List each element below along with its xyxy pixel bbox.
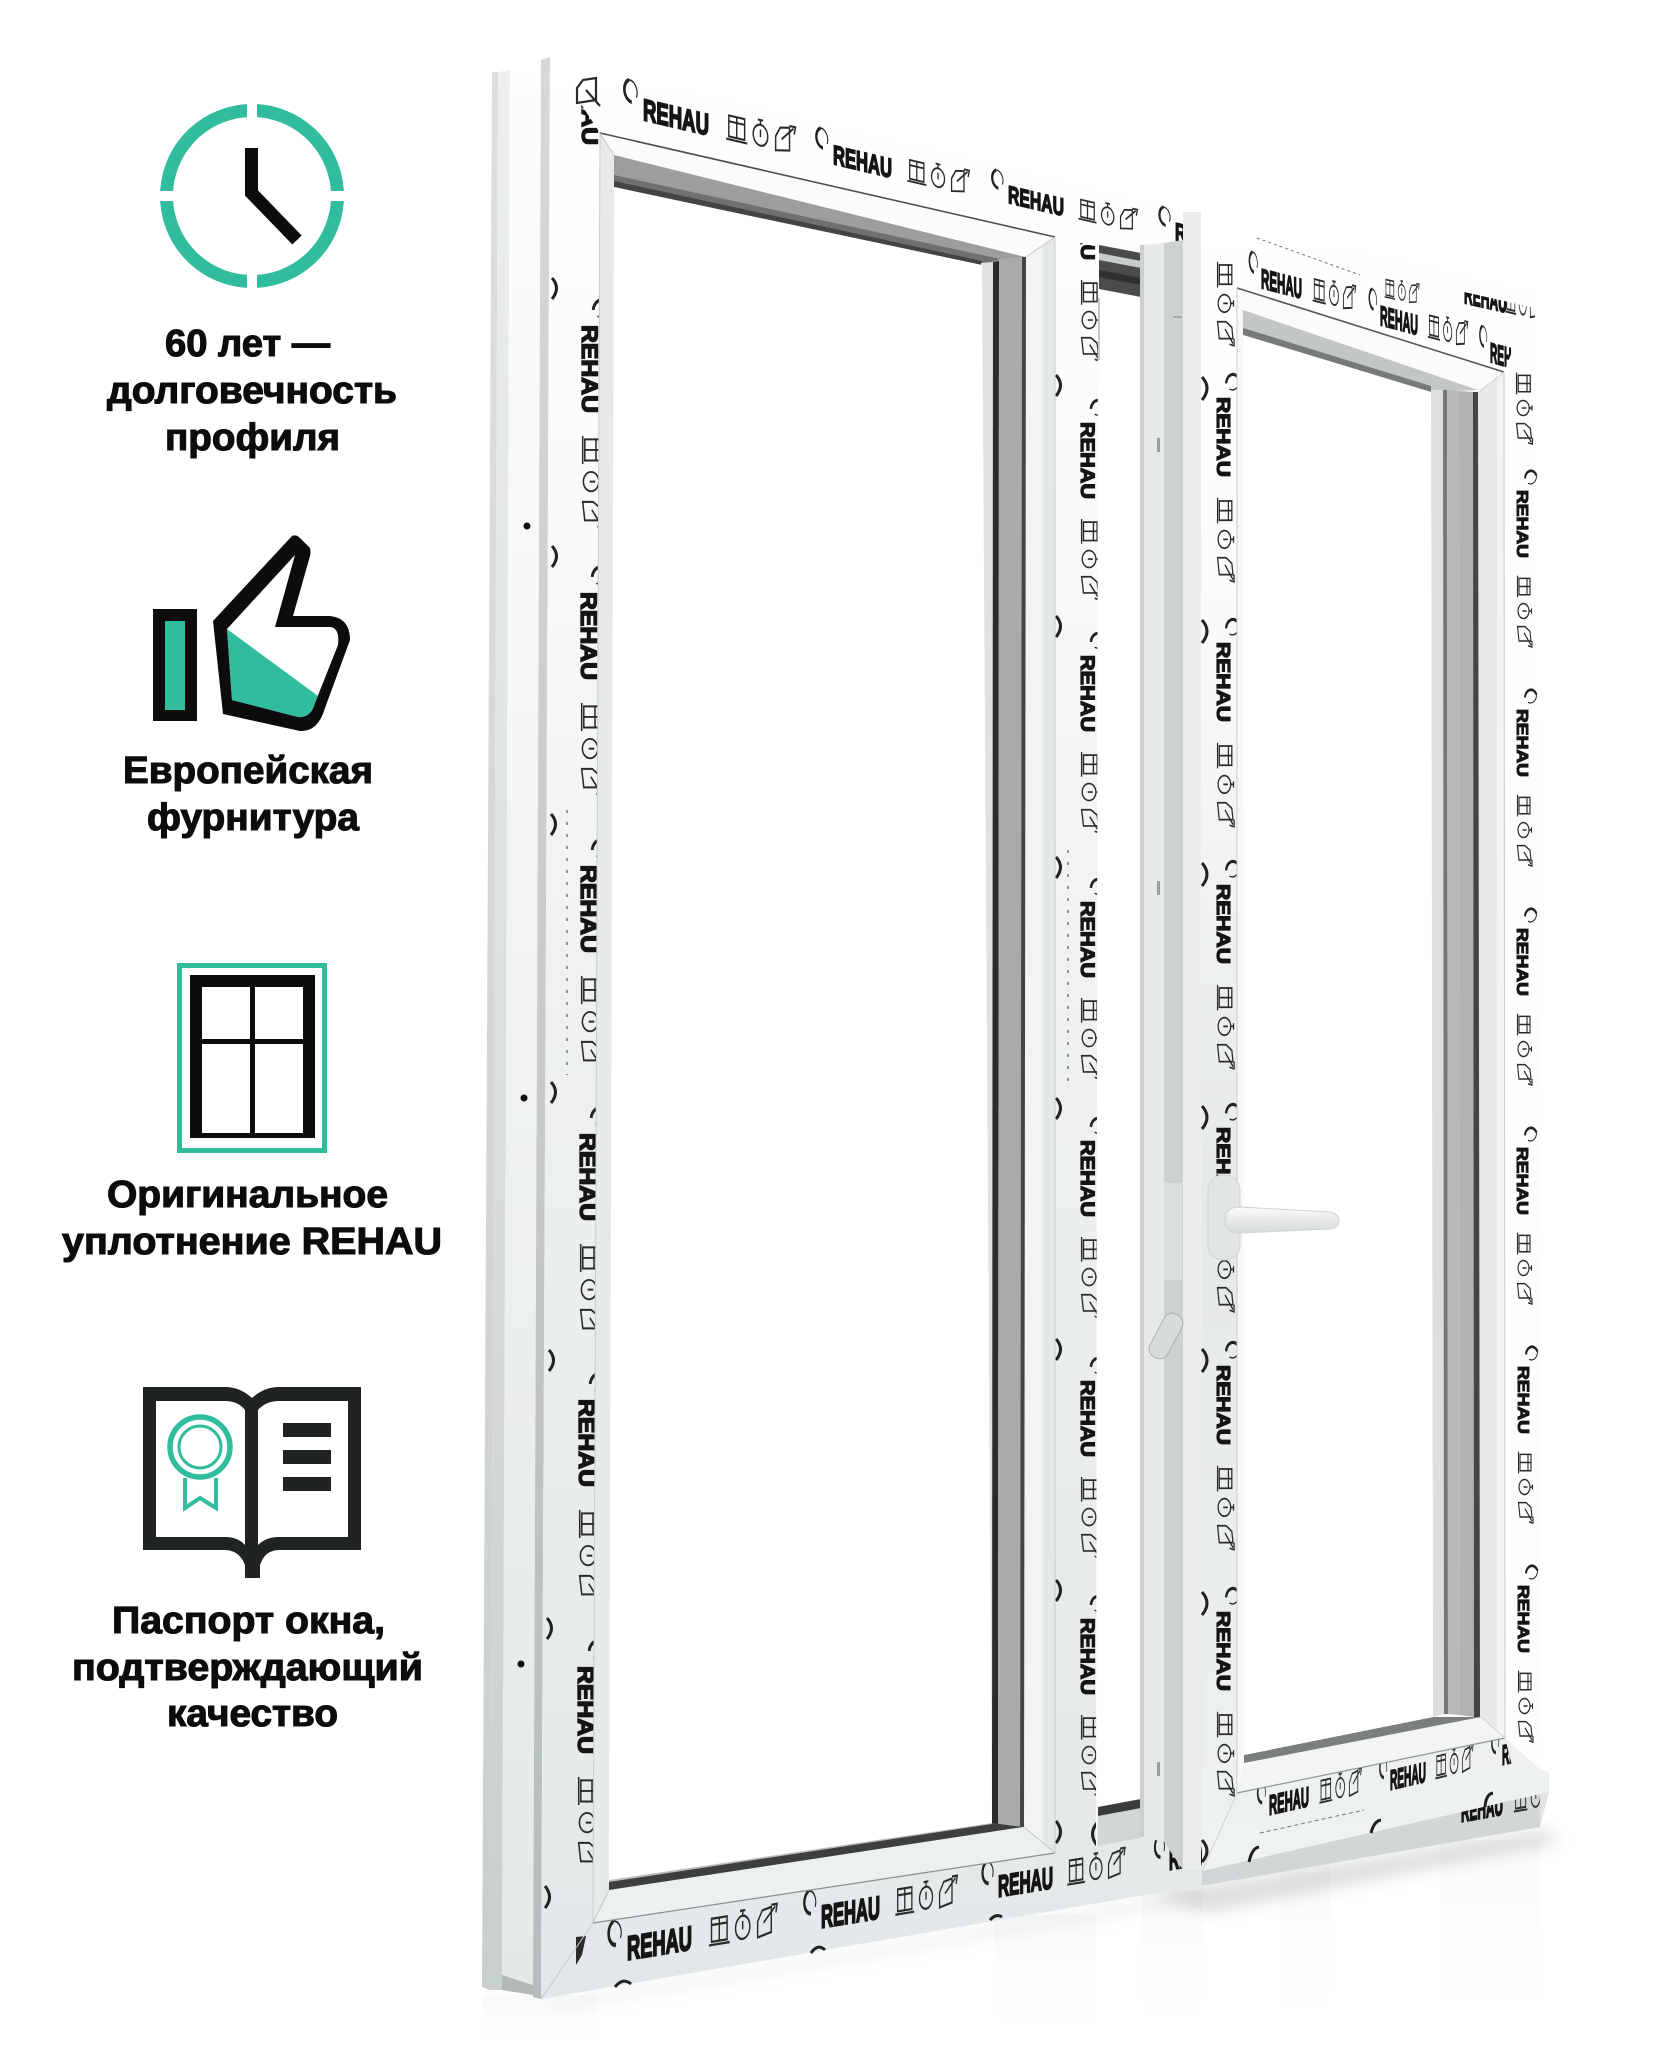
REHAU stamps: sash left stile: REHAU [1213,1365,1233,1445]
REHAU stamps: sash left stile: REHAU [1213,1611,1233,1691]
REHAU stamps: top rail of frame: REHAU [833,141,892,185]
feature 3: caption: Оригинальное [107,1174,388,1216]
feature 4: caption: подтверждающий [72,1647,423,1689]
window outer frame: side edge strips [482,57,550,1999]
feature 3: caption: уплотнение REHAU [62,1221,442,1263]
REHAU stamps: central mullion [1080,242,1098,1846]
REHAU stamps: top rail of frame: REHAU [1175,217,1230,258]
REHAU stamps: sash top rail: REHAU [1490,337,1526,378]
REHAU stamps: sash bottom rail: REHAU [1390,1757,1426,1797]
REHAU stamps: top rail of frame [624,79,1230,258]
REHAU stamps: sash right stile: REHAU [1513,709,1530,777]
feature 4: caption [72,1600,423,1735]
REHAU stamps: sash top rail: REHAU [1464,277,1507,319]
feature 1: caption: 60 лет — [165,323,330,365]
open sash: side edge [1140,212,1201,1870]
floor shadow [545,1830,1560,2010]
feature 1: caption [107,323,397,459]
circle mark fragments at face edges [545,278,1060,1987]
REHAU stamps: central mullion: REHAU [1077,183,1099,260]
feature 3: caption [62,1174,442,1263]
circle mark fragments on sash edge [1202,377,1493,1862]
dotted tape seams on frame [567,810,1068,1087]
REHAU stamps: sash top rail: REHAU [1380,299,1418,341]
REHAU stamps: top rail of frame: REHAU [1008,180,1064,222]
REHAU stamps: left stile of frame: REHAU [573,1666,597,1754]
REHAU stamps: central mullion: REHAU [1077,901,1099,978]
REHAU stamps: sash left stile: REHAU [1213,397,1233,477]
REHAU stamps: central mullion: REHAU [1077,1380,1099,1457]
REHAU stamps: sash bottom rail: REHAU [1502,1732,1538,1772]
REHAU stamps: sash bottom rail [1256,1740,1512,1834]
REHAU stamps: bottom rail of frame [609,1778,1558,1970]
REHAU stamps: bottom rail of frame: REHAU [627,1919,692,1967]
feature 1: caption: долговечность [107,370,397,412]
sash glazed pane with bead and reveal [1202,288,1505,1871]
REHAU stamps: sash left stile: REHAU [1213,642,1233,722]
REHAU stamps: left stile of frame: REHAU [577,325,601,413]
REHAU stamps: sash right stile: REHAU [1513,1147,1530,1215]
REHAU stamps: sash left stile [1213,262,1239,1796]
REHAU stamps: bottom rail of frame: REHAU [998,1861,1053,1904]
REHAU stamps: bottom rail of frame: REHAU [821,1889,880,1935]
REHAU stamps: sash top rail: REHAU [1261,263,1302,305]
feature 4: caption: качество [167,1693,338,1735]
REHAU stamps: sash right stile [1513,373,1538,1742]
REHAU stamps: sash right stile: REHAU [1514,1366,1531,1434]
floor reflection [482,1840,1540,2053]
REHAU stamps: sash bottom rail: REHAU [1269,1780,1309,1821]
REHAU stamps: left stile of frame: REHAU [576,592,600,680]
REHAU stamps: central mullion: REHAU [1077,655,1099,732]
window outer frame: front face [541,57,1540,1999]
REHAU stamps: bottom rail of frame: REHAU [1169,1836,1219,1876]
left glazed pane with bead and reveal [541,133,1055,1999]
frame fixing holes [518,522,530,1668]
feature 1: caption: профиля [165,417,340,459]
REHAU stamps: central mullion: REHAU [1077,1618,1099,1695]
REHAU stamps: central mullion: REHAU [1077,422,1099,499]
feature 2: caption: Европейская [123,750,373,792]
open sash: front face [1201,212,1549,1871]
REHAU stamps: left stile of frame: REHAU [577,57,601,145]
REHAU stamps: top rail of frame: REHAU [643,92,709,142]
feature 1: clock icon [154,98,350,294]
REHAU stamps: left stile of frame: REHAU [576,865,600,953]
feature 2: caption [123,750,373,839]
feature 4: passport book icon [143,1387,361,1578]
REHAU stamps: sash right stile: REHAU [1513,490,1530,558]
REHAU stamps: left stile of frame: REHAU [574,1399,598,1487]
REHAU stamps: sash top rail [1249,238,1540,378]
REHAU stamps: central mullion: REHAU [1077,1140,1099,1217]
feature 3: window icon [180,966,324,1150]
feature 4: caption: Паспорт окна, [112,1600,385,1642]
REHAU stamps: bottom rail of frame: REHAU [1461,1789,1503,1828]
REHAU stamps: sash left stile: REHAU [1213,884,1233,964]
REHAU stamps: sash right stile: REHAU [1513,928,1530,996]
window handle [1146,1175,1339,1362]
REHAU stamps: sash right stile: REHAU [1514,1585,1531,1653]
feature 2: thumbs-up icon [153,535,350,731]
shadow cast by open sash on frame [1202,1792,1549,1886]
REHAU stamps: left stile of frame: REHAU [575,1133,599,1221]
right opening seen through open sash [1096,245,1142,1846]
feature 2: caption: фурнитура [147,797,360,839]
REHAU stamps: sash left stile: REHAU [1213,1127,1233,1207]
REHAU stamps: left stile of frame [576,76,601,1965]
